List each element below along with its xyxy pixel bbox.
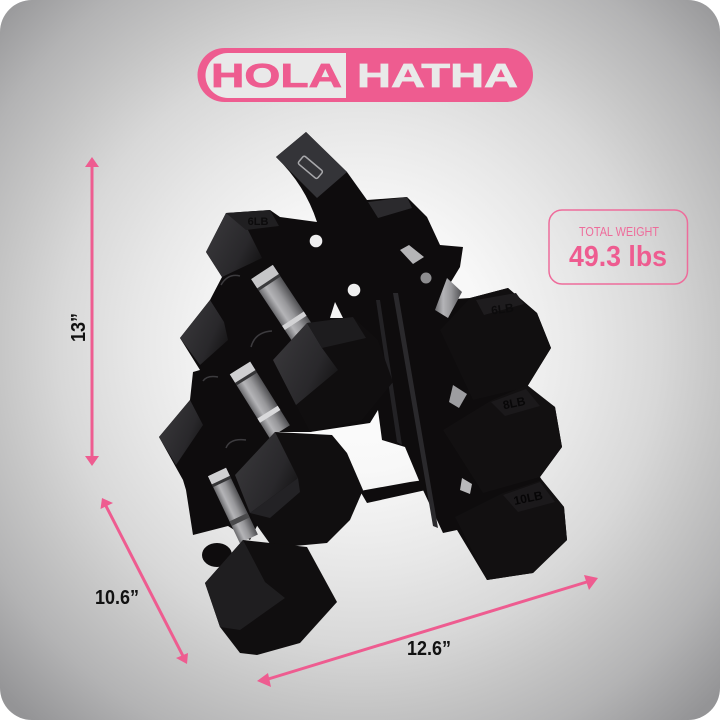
callout: total weight: TOTAL WEIGHT (579, 224, 659, 239)
dimension arrow: depth 10.6 inches (100, 498, 188, 664)
width label: 12.6” (407, 638, 451, 660)
steel handle upper (251, 265, 316, 344)
logo: Hola Hatha: HATHA (357, 57, 518, 94)
back dumbbell label face (368, 197, 412, 218)
depth label: 10.6” (95, 587, 139, 609)
dumbbell head 10LB: 10LB (512, 488, 544, 508)
dimension arrow: width 12.6 inches (257, 575, 598, 687)
rack holes and gap (310, 235, 432, 318)
dumbbell head front upper (273, 317, 393, 432)
callout: total weight: 49.3 lbs (569, 241, 667, 273)
dumbbell head 10LB (455, 480, 567, 580)
dumbbell head front lower (205, 540, 337, 655)
dumbbell head top left (206, 210, 279, 277)
crossbar (360, 480, 426, 503)
dumbbell head 8LB: 8LB (502, 394, 527, 412)
dimension arrow: height 13 inches (85, 157, 99, 466)
rack handle plate (276, 132, 347, 198)
product: dumbbell rack (159, 132, 567, 655)
callout: total weight (549, 210, 688, 284)
dumbbell head 6LB: 6LB (490, 300, 515, 318)
right handle stubs (400, 245, 472, 494)
steel handle middle (230, 362, 290, 438)
dumbbell head lower left (159, 400, 203, 465)
dumbbell head 8LB (443, 385, 562, 493)
dumbbell head top left: 6LB (248, 216, 268, 228)
steel handle lower (208, 468, 258, 543)
rack and dumbbell silhouette (159, 132, 567, 580)
dumbbell head middle left (180, 300, 228, 365)
height label: 13” (68, 313, 90, 342)
rack leg highlights (376, 293, 438, 528)
logo: Hola Hatha (198, 48, 533, 102)
logo: Hola Hatha: HOLA (211, 57, 342, 94)
left rubber end caps (202, 275, 272, 567)
dumbbell head 6LB (440, 288, 551, 400)
dumbbell head front middle (235, 432, 363, 548)
